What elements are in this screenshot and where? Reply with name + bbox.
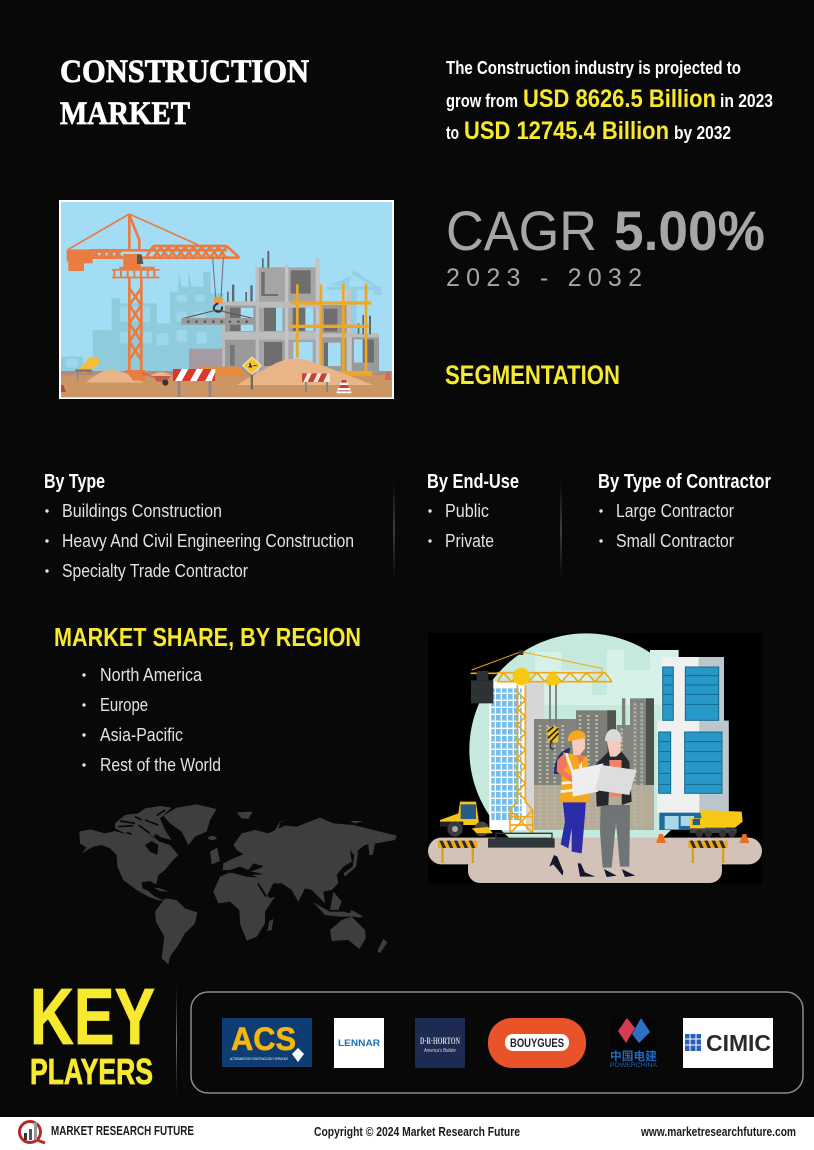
worker in orange vest	[549, 730, 595, 877]
projection text block: by 2032	[674, 123, 731, 143]
region list: Europe	[100, 695, 148, 715]
sand piles and bricks	[197, 367, 247, 376]
footer bar: MARKET RESEARCH FUTURE	[51, 1123, 194, 1138]
title: MARKET	[60, 96, 190, 132]
segment: by end-use: By End-Use	[427, 471, 519, 493]
segment: by type: Specialty Trade Contractor	[62, 561, 248, 581]
footer bar: Copyright © 2024 Market Research Future	[314, 1124, 520, 1139]
segment: by type of contractor	[598, 471, 771, 551]
title	[60, 54, 309, 132]
right blue building	[657, 657, 729, 830]
projection text block: USD 12745.4 Billion	[464, 117, 669, 145]
striped barrier large	[173, 369, 215, 397]
footer logo	[20, 1122, 45, 1143]
segment: by type: By Type	[44, 471, 105, 493]
projection text block: to	[446, 123, 459, 143]
background city silhouette	[61, 270, 382, 373]
crane hook and concrete beam	[181, 258, 255, 325]
region list	[82, 665, 221, 775]
projection text block: The Construction industry is projected to	[446, 58, 741, 78]
crane base	[488, 833, 555, 848]
mint circle backdrop	[469, 633, 679, 838]
road barriers	[438, 841, 728, 863]
grey towers behind workers	[534, 698, 654, 830]
logo: Lennar	[334, 1018, 384, 1068]
unfinished building	[189, 251, 379, 374]
logo: CIMIC	[683, 1018, 773, 1068]
logo: Lennar: LENNAR	[338, 1038, 381, 1048]
segment: by end-use: Private	[445, 531, 494, 551]
world map	[79, 804, 397, 964]
segment: by type of contractor: Large Contractor	[616, 501, 734, 521]
cement mixer	[75, 357, 99, 381]
orange tower crane	[68, 214, 239, 372]
footer bar	[0, 1117, 814, 1150]
logo: PowerChina: 中国电建	[610, 1049, 658, 1063]
yellow tower crane	[471, 652, 612, 833]
blueprints	[572, 763, 637, 797]
logo: D.R. Horton: America's Builder	[423, 1048, 456, 1054]
segment: by type of contractor: By Type of Contractor	[598, 471, 771, 493]
market share heading: MARKET SHARE, BY REGION	[54, 622, 361, 652]
logo: ACS: ACS	[231, 1021, 296, 1057]
road roller	[440, 802, 493, 837]
logo: ACS	[222, 1018, 312, 1067]
projection text block	[446, 58, 773, 145]
region list: Asia-Pacific	[100, 725, 183, 745]
logo: D.R. Horton	[415, 1018, 465, 1068]
CAGR value	[446, 199, 765, 262]
CAGR period: 2023 - 2032	[446, 264, 642, 292]
two workers reading blueprints	[549, 729, 637, 877]
logo: CIMIC: CIMIC	[706, 1030, 771, 1056]
segment: by type: Buildings Construction	[62, 501, 222, 521]
left glass tower	[489, 682, 544, 830]
CAGR value: 5.00%	[614, 199, 765, 262]
projection text block: USD 8626.5 Billion	[523, 85, 716, 113]
region list: Rest of the World	[100, 755, 221, 775]
wheelbarrow	[142, 373, 171, 386]
segmentation heading: SEGMENTATION	[445, 360, 620, 390]
segment: by type of contractor: Small Contractor	[616, 531, 734, 551]
title: CONSTRUCTION	[60, 54, 309, 90]
logo: Bouygues: BOUYGUES	[510, 1036, 564, 1050]
segment: by type: Heavy And Civil Engineering Construction	[62, 531, 354, 551]
segment: by type	[44, 471, 354, 581]
logo: PowerChina	[610, 1018, 658, 1069]
striped barrier small	[302, 373, 330, 392]
ground	[428, 838, 762, 883]
region list: North America	[100, 665, 203, 685]
team at construction site illustration	[428, 633, 762, 883]
map: Americas and Greenland	[79, 804, 217, 964]
orange cones	[656, 834, 749, 843]
ground	[61, 371, 392, 376]
logo: PowerChina: POWERCHINA	[610, 1063, 657, 1069]
projection text block: grow from	[446, 91, 518, 111]
logo: Bouygues	[488, 1018, 586, 1068]
map: Africa, Eurasia and Oceania	[210, 812, 397, 953]
key players heading	[30, 972, 155, 1092]
logo: D.R. Horton: D·R·HORTON	[420, 1036, 460, 1046]
worker with white hard hat	[595, 729, 635, 877]
key players panel	[191, 992, 803, 1093]
key players heading: PLAYERS	[30, 1051, 153, 1092]
yellow scaffolding	[290, 284, 372, 376]
segment: by end-use: Public	[445, 501, 489, 521]
dump truck	[690, 810, 743, 837]
warning sign	[243, 357, 261, 389]
logo: ACS: ACTIVIDADES DE CONSTRUCCION Y SERVICIOS	[230, 1056, 288, 1061]
construction site illustration	[59, 200, 394, 399]
traffic cones	[61, 372, 391, 393]
segment: by end-use	[427, 471, 519, 551]
CAGR value: CAGR	[446, 199, 597, 262]
key players heading: KEY	[30, 972, 155, 1061]
projection text block: in 2023	[720, 91, 773, 111]
